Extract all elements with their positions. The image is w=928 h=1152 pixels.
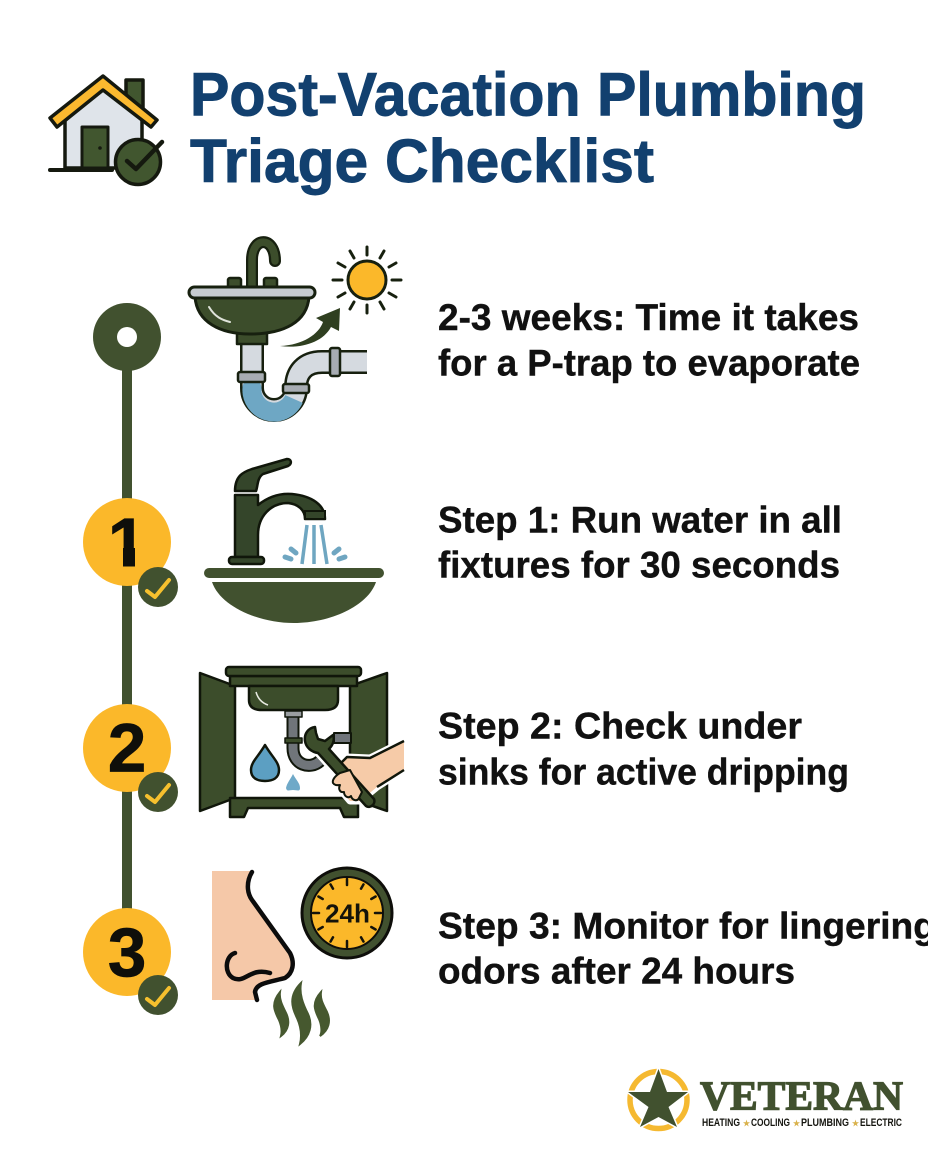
faucet (252, 242, 275, 287)
clock (302, 868, 392, 958)
icon: under-sink cabinet with wrench (200, 667, 404, 817)
logo tagline: ★ (793, 1119, 801, 1128)
text: P-trap evaporation (438, 297, 860, 384)
odor waves (274, 992, 288, 1036)
step 3 badge (83, 908, 178, 1015)
text: step 1: Step 1: Run water in all (438, 500, 842, 540)
fingers (333, 770, 362, 800)
text: step 3: odors after 24 hours (438, 950, 795, 992)
timeline line (122, 340, 132, 960)
text: P-trap evaporation: for a P-trap to evaporate (438, 342, 860, 384)
icon: running faucet and basin (204, 459, 384, 623)
logo tagline: PLUMBING (801, 1117, 849, 1129)
step 1 badge (83, 498, 178, 607)
wrench (305, 727, 374, 807)
logo tagline: COOLING (751, 1117, 790, 1129)
trapped water (252, 388, 294, 412)
icon: house with check (50, 76, 162, 184)
logo tagline: HEATING (702, 1117, 740, 1129)
evaporation arrow (280, 308, 340, 347)
title (190, 60, 866, 195)
step 3 badge: 3 (108, 914, 146, 991)
text: step 2: Step 2: Check under (438, 706, 802, 746)
text: step 1: fixtures for 30 seconds (438, 544, 840, 586)
timeline start node (93, 303, 161, 371)
title: Triage Checklist (190, 127, 654, 195)
text: P-trap evaporation: 2-3 weeks: Time it takes (438, 297, 859, 338)
timeline (83, 303, 178, 1015)
drain pipe (293, 712, 320, 765)
text: step 2 (438, 706, 849, 792)
text: step 1 (438, 500, 842, 586)
icon: sink with P-trap and sun (189, 242, 401, 412)
step 1 badge: 1 (108, 504, 146, 581)
water drops (251, 745, 279, 781)
water stream (302, 525, 327, 564)
logo tagline: ★ (852, 1119, 860, 1128)
icon: nose with odor and 24h clock: 24h (325, 898, 370, 928)
text: step 3: Step 3: Monitor for lingering (438, 906, 928, 946)
logo tagline (702, 1117, 902, 1129)
hand (333, 741, 404, 801)
basin (237, 332, 267, 344)
icon: nose with odor and 24h clock (212, 868, 392, 1044)
title: Post-Vacation Plumbing (190, 60, 866, 128)
logo: Veteran (628, 1069, 903, 1129)
logo tagline: ★ (743, 1119, 751, 1128)
step 2 badge (83, 704, 178, 812)
logo star emblem (628, 1069, 688, 1128)
logo wordmark: VETERAN (700, 1072, 903, 1118)
step 2 badge: 2 (108, 710, 146, 786)
text: step 2: sinks for active dripping (438, 752, 849, 792)
pipe (252, 342, 367, 410)
logo tagline: ELECTRIC (860, 1117, 902, 1129)
sun (348, 261, 386, 299)
text: step 3 (438, 906, 928, 992)
